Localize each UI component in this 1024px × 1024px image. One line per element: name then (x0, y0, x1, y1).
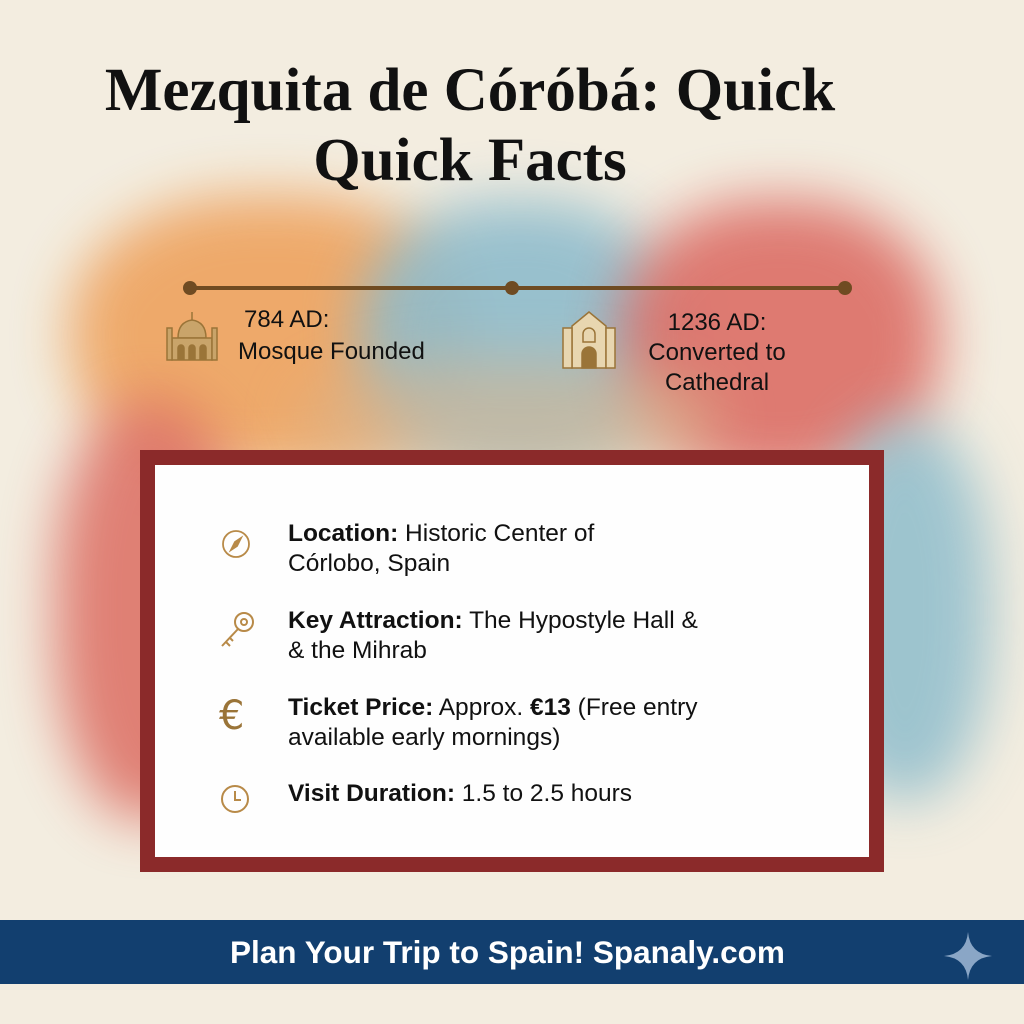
event: 1236: 1236 AD: (668, 309, 766, 336)
fact: location: Córlobo, Spain (288, 550, 450, 577)
icon: sparkle (944, 932, 992, 980)
fact: key attraction: & the Mihrab (288, 637, 427, 664)
title: Mezquita de Córóbá: Quick (105, 57, 835, 124)
timeline (183, 281, 852, 295)
icon: compass (222, 530, 250, 558)
title (105, 57, 836, 194)
fact: location: Location: Historic Center of (288, 520, 594, 547)
event: 784: 784 AD: (244, 306, 329, 333)
fact: key attraction: Key Attraction: The Hypostyle Hall & (288, 607, 698, 634)
fact: ticket price: Ticket Price: Approx. €13 (Free entry (288, 694, 697, 721)
icon: mosque (166, 312, 218, 361)
footer banner: Plan Your Trip to Spain! Spanaly.com (230, 934, 785, 970)
icon: euro: € (219, 693, 244, 739)
icon: key (221, 612, 254, 647)
event: 1236: Converted to (648, 339, 786, 366)
footer banner (0, 920, 1024, 984)
event: 784 (238, 306, 425, 365)
fact: visit duration: Visit Duration: 1.5 to 2.5 hours (288, 780, 632, 807)
fact: ticket price: available early mornings) (288, 724, 560, 751)
fact: ticket price (288, 694, 698, 751)
event: 1236 (648, 309, 786, 396)
icon: cathedral (562, 311, 616, 369)
title: Quick Facts (313, 127, 627, 194)
icon: clock (221, 785, 249, 813)
event: 1236: Cathedral (665, 369, 769, 396)
event: 784: Mosque Founded (238, 338, 425, 365)
panel: facts (140, 450, 884, 872)
fact: key attraction (288, 607, 698, 664)
fact: location (288, 520, 594, 577)
